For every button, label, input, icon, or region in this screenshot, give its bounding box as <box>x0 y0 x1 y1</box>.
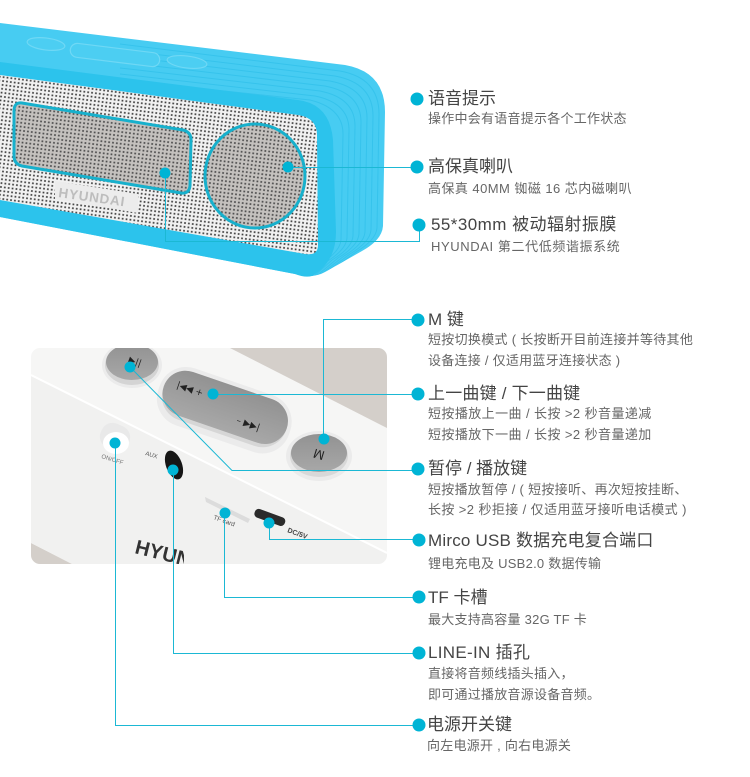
speaker driver highlight <box>205 124 305 228</box>
callout: TF card slot <box>428 588 587 627</box>
beige background corners <box>230 348 387 428</box>
callout: radiator diaphragm: HYUNDAI 第二代低频谐振系统 <box>431 239 620 254</box>
callout: micro USB port: 锂电充电及 USB2.0 数据传输 <box>428 556 601 571</box>
leader lines <box>116 168 420 726</box>
product illustrations and leader lines <box>0 23 426 732</box>
callout: power switch <box>427 715 571 753</box>
AUX jack: AUX <box>144 451 158 461</box>
HYUNDAI logo plate: HYUNDAI <box>58 185 126 209</box>
callout: line-in jack: LINE-IN 插孔 <box>428 643 530 662</box>
previous/next button: |◀◀ + <box>175 381 204 399</box>
radiator diaphragm highlight <box>14 103 191 193</box>
callout: voice prompt: 语音提示 <box>428 89 496 108</box>
callout: previous / next key: 上一曲键 / 下一曲键 <box>428 384 580 403</box>
perforated silver grille <box>0 75 318 254</box>
photo: speaker top controls and ports <box>31 342 387 580</box>
callout: hi-fi speaker: 高保真 40MM 铷磁 16 芯内磁喇叭 <box>428 181 632 196</box>
callout: TF card slot: 最大支持高容量 32G TF 卡 <box>428 612 587 627</box>
callout: line-in jack: 即可通过播放音源设备音频。 <box>428 687 600 702</box>
play/pause button <box>102 348 162 388</box>
speaker top surface and ribbed side <box>0 23 385 276</box>
micro USB port: DC/5V <box>286 527 308 541</box>
speaker: blue silicone case, front view <box>0 23 385 278</box>
body front face <box>35 545 64 560</box>
callout dots <box>110 92 426 732</box>
callout: M key: M 键 <box>428 310 464 329</box>
on/off switch <box>102 432 129 464</box>
callout: radiator diaphragm: 55*30mm 被动辐射振膜 <box>431 215 617 234</box>
callout: TF card slot: TF 卡槽 <box>428 588 488 607</box>
callout: M key: 短按切换模式 ( 长按断开目前连接并等待其他 <box>428 332 693 347</box>
callout: hi-fi speaker: 高保真喇叭 <box>428 157 513 176</box>
top control bumps <box>26 36 208 70</box>
callout: voice prompt <box>428 89 627 126</box>
TF card slot <box>205 497 250 529</box>
callout: voice prompt: 操作中会有语音提示各个工作状态 <box>428 111 627 126</box>
callout: previous / next key: 短按播放上一曲 / 长按 >2 秒音量递减 <box>428 406 652 421</box>
callout: M key: 设备连接 / 仅适用蓝牙连接状态 ) <box>428 353 620 368</box>
M button: M <box>311 446 326 463</box>
callout: power switch: 向左电源开 , 向右电源关 <box>427 738 571 753</box>
HYUNDAI logo plate <box>55 181 138 213</box>
TF card slot: TF card <box>212 514 236 529</box>
callout: previous / next key: 短按播放下一曲 / 长按 >2 秒音量递加 <box>428 427 652 442</box>
callout: line-in jack: 直接将音频线插头插入， <box>428 666 574 681</box>
ribs on speaker side <box>120 44 379 278</box>
callout: pause / play key <box>428 459 688 517</box>
callout: M key <box>428 310 693 368</box>
M button <box>286 431 352 481</box>
previous/next button <box>157 367 292 454</box>
callout: micro USB port: Mirco USB 数据充电复合端口 <box>428 531 654 550</box>
callout: micro USB port <box>428 531 654 571</box>
play/pause button: ▶|| <box>127 355 143 369</box>
callout: pause / play key: 短按播放暂停 / ( 短按接听、再次短按挂断、 <box>428 482 688 497</box>
callout: line-in jack <box>428 643 600 702</box>
callout: previous / next key <box>428 384 652 442</box>
previous/next button: – ▶▶| <box>235 416 261 433</box>
HYUNDAI logo on photo: HYUNDAI <box>133 537 227 580</box>
callout: pause / play key: 长按 >2 秒拒接 / 仅适用蓝牙接听电话模式 ) <box>428 502 687 517</box>
on/off switch: ON/OFF <box>100 454 124 467</box>
callout: pause / play key: 暂停 / 播放键 <box>428 459 527 478</box>
micro USB port <box>254 508 308 538</box>
callout: radiator diaphragm <box>431 215 620 254</box>
callout: power switch: 电源开关键 <box>427 715 512 734</box>
AUX jack <box>145 450 184 480</box>
front frame <box>0 62 336 277</box>
callout: hi-fi speaker <box>428 157 632 196</box>
